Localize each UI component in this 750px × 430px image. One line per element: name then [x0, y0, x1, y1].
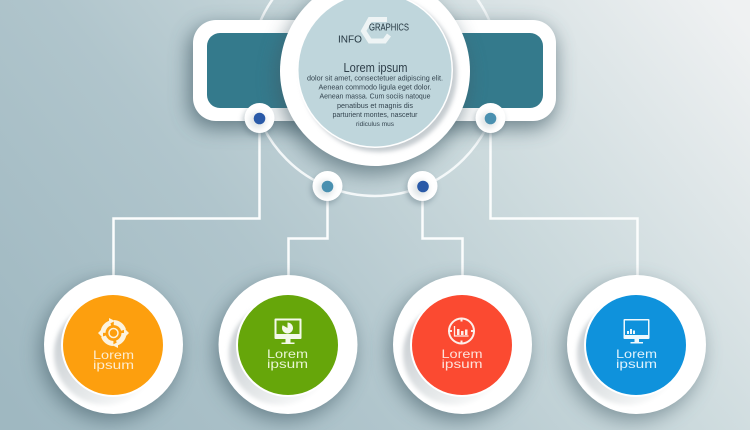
node: top left [243, 103, 274, 136]
connector line: red [422, 186, 462, 280]
label: green [267, 347, 308, 371]
panel: blue [564, 275, 706, 420]
node: top right [474, 103, 506, 136]
connector line: orange [114, 118, 260, 280]
body text: Aenean massa. Cum sociis natoque [320, 94, 431, 100]
body text: parturient montes, nascetur [332, 112, 418, 119]
logo: hexagon G [364, 20, 389, 41]
panel: red [390, 275, 532, 420]
body text: dolor sit amet, consectetuer adipiscing elit. [307, 76, 443, 82]
label: blue: Lorem [616, 347, 657, 361]
label: orange [93, 348, 134, 372]
label: green: ipsum [267, 357, 308, 371]
label: red: Lorem [442, 347, 483, 361]
logo text: INFO: INFO [338, 34, 362, 46]
label: blue [616, 347, 657, 371]
label: blue: ipsum [616, 357, 657, 371]
node: lower right [406, 171, 438, 204]
main circle [277, 0, 470, 174]
body text: Aenean commodo ligula eget dolor. [318, 84, 432, 92]
connector ring [250, 0, 500, 196]
icon: cycle arrows [98, 318, 129, 348]
label: green: Lorem [267, 347, 308, 361]
icon: monitor with bars [624, 319, 650, 344]
panel: orange [41, 275, 183, 420]
connector line: blue [490, 118, 638, 280]
label: red: ipsum [442, 357, 482, 371]
body text: ridiculus mus [356, 122, 394, 128]
body text [307, 76, 443, 128]
label: orange: ipsum [93, 358, 134, 372]
label: red [442, 347, 483, 371]
body text: penatibus et magnis dis [337, 103, 414, 110]
header banner [189, 20, 556, 128]
connector line: green [288, 186, 328, 280]
main heading: Lorem ipsum [344, 61, 408, 75]
logo text: GRAPHICS: GRAPHICS [369, 23, 409, 34]
node: lower left [311, 171, 342, 204]
label: orange: Lorem [93, 348, 134, 362]
icon: target with bars [448, 318, 475, 344]
panel: green [216, 275, 358, 420]
icon: monitor with pie chart [274, 318, 302, 344]
